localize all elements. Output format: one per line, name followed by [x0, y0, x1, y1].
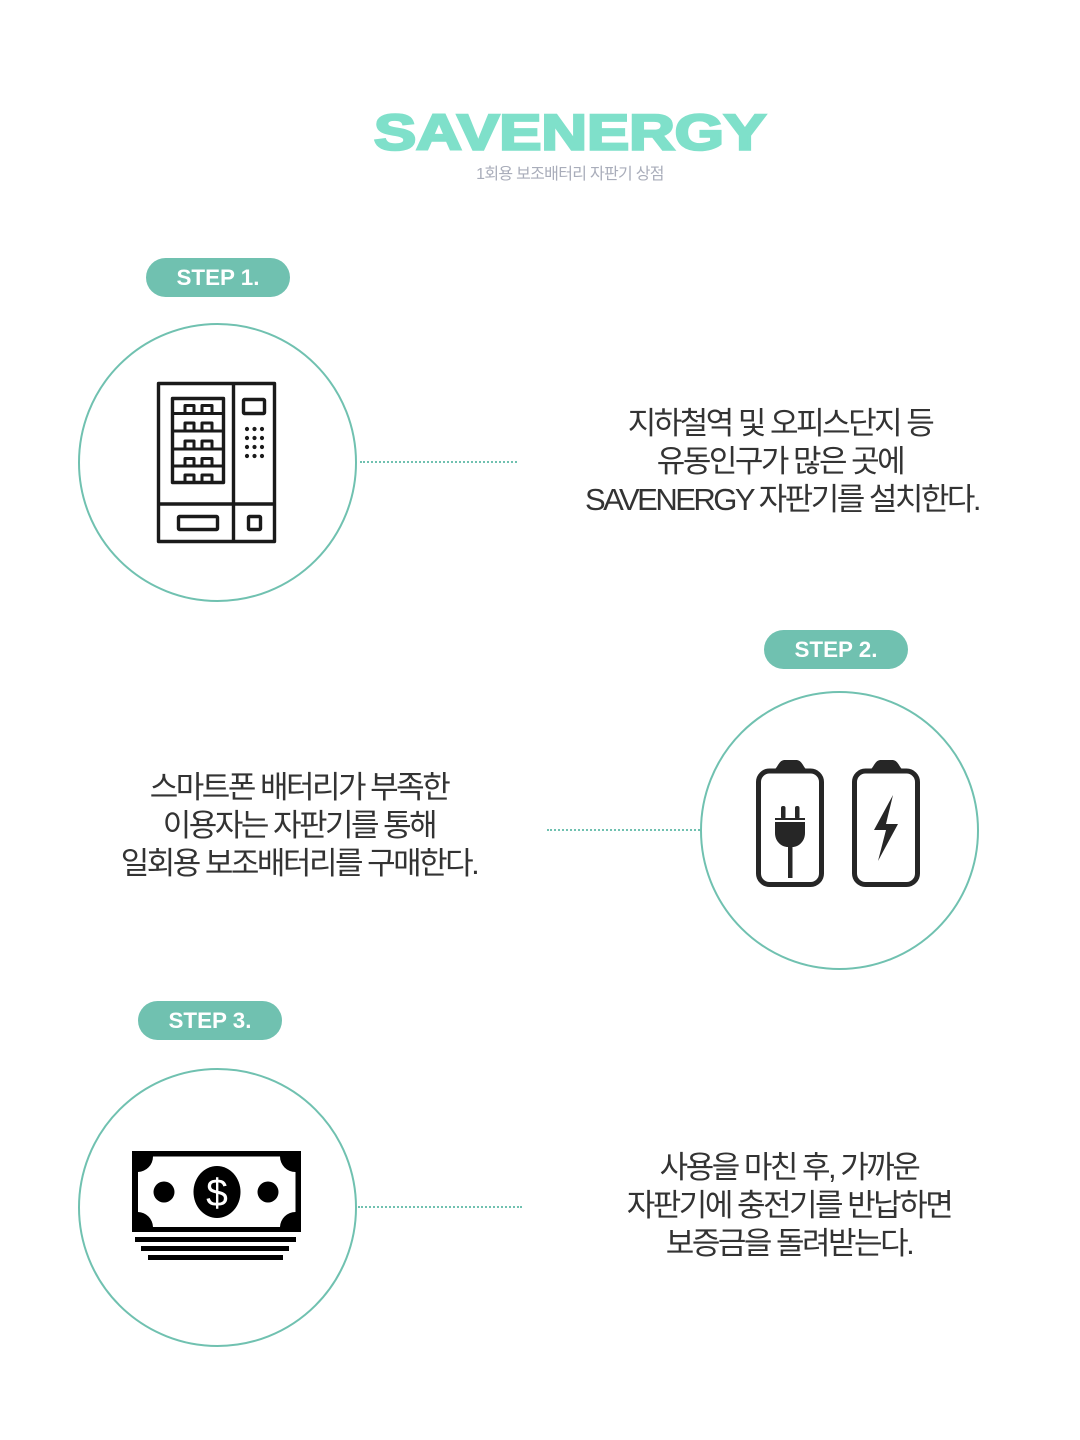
step 1 description	[585, 406, 979, 517]
connector: step 3	[358, 1206, 522, 1208]
step 3 badge	[138, 1001, 282, 1040]
icon: banknote stack: $	[206, 1172, 228, 1215]
icon: banknote stack	[132, 1151, 301, 1260]
step 2 badge	[764, 630, 908, 669]
step 2 description: 이용자는 자판기를 통해	[163, 808, 435, 843]
step 2 circle	[700, 691, 979, 970]
connector: step 1	[360, 461, 517, 463]
step 2 badge: STEP 2.	[794, 637, 877, 662]
step 2 description: 일회용 보조배터리를 구매한다.	[121, 846, 477, 881]
title: SAVENERGY logo: SAVENERGY	[374, 104, 766, 160]
step 1 badge	[146, 258, 290, 297]
icon: batteries	[756, 760, 920, 887]
step 3 description	[627, 1150, 951, 1261]
step 2 description	[121, 770, 477, 881]
step 3 description: 보증금을 돌려받는다.	[666, 1226, 912, 1261]
step 3 circle	[78, 1068, 357, 1347]
icon: vending machine	[156, 382, 276, 544]
step 3 description: 사용을 마친 후, 가까운	[660, 1150, 918, 1185]
step 1 circle	[78, 323, 357, 602]
step 1 badge: STEP 1.	[176, 265, 259, 290]
step 1 description: SAVENERGY 자판기를 설치한다.	[585, 482, 979, 517]
step 2 description: 스마트폰 배터리가 부족한	[150, 770, 448, 805]
subtitle: 1회용 보조배터리 자판기 상점	[476, 166, 664, 183]
step 1 description: 유동인구가 많은 곳에	[657, 444, 903, 479]
step 3 description: 자판기에 충전기를 반납하면	[627, 1188, 951, 1223]
connector: step 2	[547, 829, 700, 831]
step 3 badge: STEP 3.	[168, 1008, 251, 1033]
step 1 description: 지하철역 및 오피스단지 등	[628, 406, 932, 441]
